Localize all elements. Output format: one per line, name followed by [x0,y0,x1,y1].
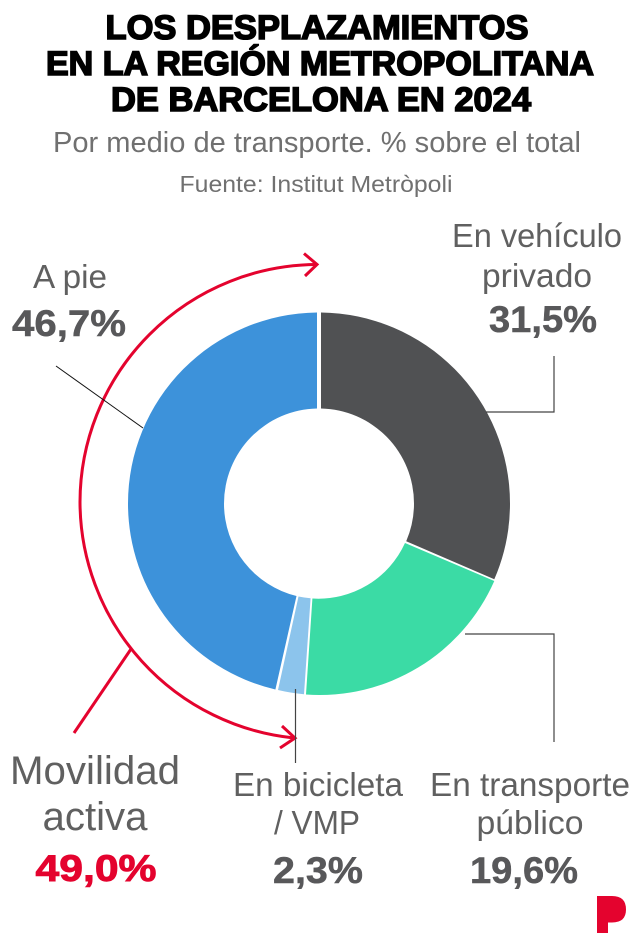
title [46,9,594,119]
label: movilidad activa: activa [42,795,148,839]
label: en transporte público: En transporte [430,766,630,803]
label: en vehículo privado: privado [482,257,592,294]
label: en vehículo privado: En vehículo [452,217,622,254]
leader: en vehículo privado [486,356,554,412]
icon: logo P [597,896,626,933]
label: en bicicleta / VMP [233,766,404,891]
leader: a pie [56,366,143,428]
label: movilidad activa: Movilidad [10,749,180,793]
title: EN LA REGIÓN METROPOLITANA [46,45,594,83]
label: movilidad activa [10,749,180,889]
label: a pie: 46,7% [12,303,126,344]
label: en transporte público: 19,6% [470,850,578,891]
label: en bicicleta / VMP: 2,3% [273,850,363,891]
donut chart [128,312,510,695]
label: a pie [12,258,126,344]
arrow: movilidad activa arc [80,254,317,748]
label: en bicicleta / VMP: En bicicleta [233,766,404,803]
label: a pie: A pie [33,258,107,295]
title: LOS DESPLAZAMIENTOS [106,9,528,47]
source: Fuente: Institut Metròpoli [180,171,452,197]
title: DE BARCELONA EN 2024 [111,81,531,119]
leader: en transporte público [465,634,554,742]
label: en bicicleta / VMP: / VMP [274,804,360,841]
segment: en bicicleta / VMP [278,596,311,694]
label: movilidad activa: 49,0% [36,848,156,889]
label: en vehículo privado [452,217,622,340]
leader: movilidad activa [74,649,131,733]
label: en transporte público: público [476,804,584,841]
label: en vehículo privado: 31,5% [489,299,597,340]
subtitle: Por medio de transporte. % sobre el total [53,127,581,159]
segment: a pie [128,312,317,690]
label: en transporte público [430,766,630,891]
leader: en bicicleta [294,689,296,763]
segment: en vehículo privado [321,312,510,579]
segment: en transporte público [306,543,494,695]
